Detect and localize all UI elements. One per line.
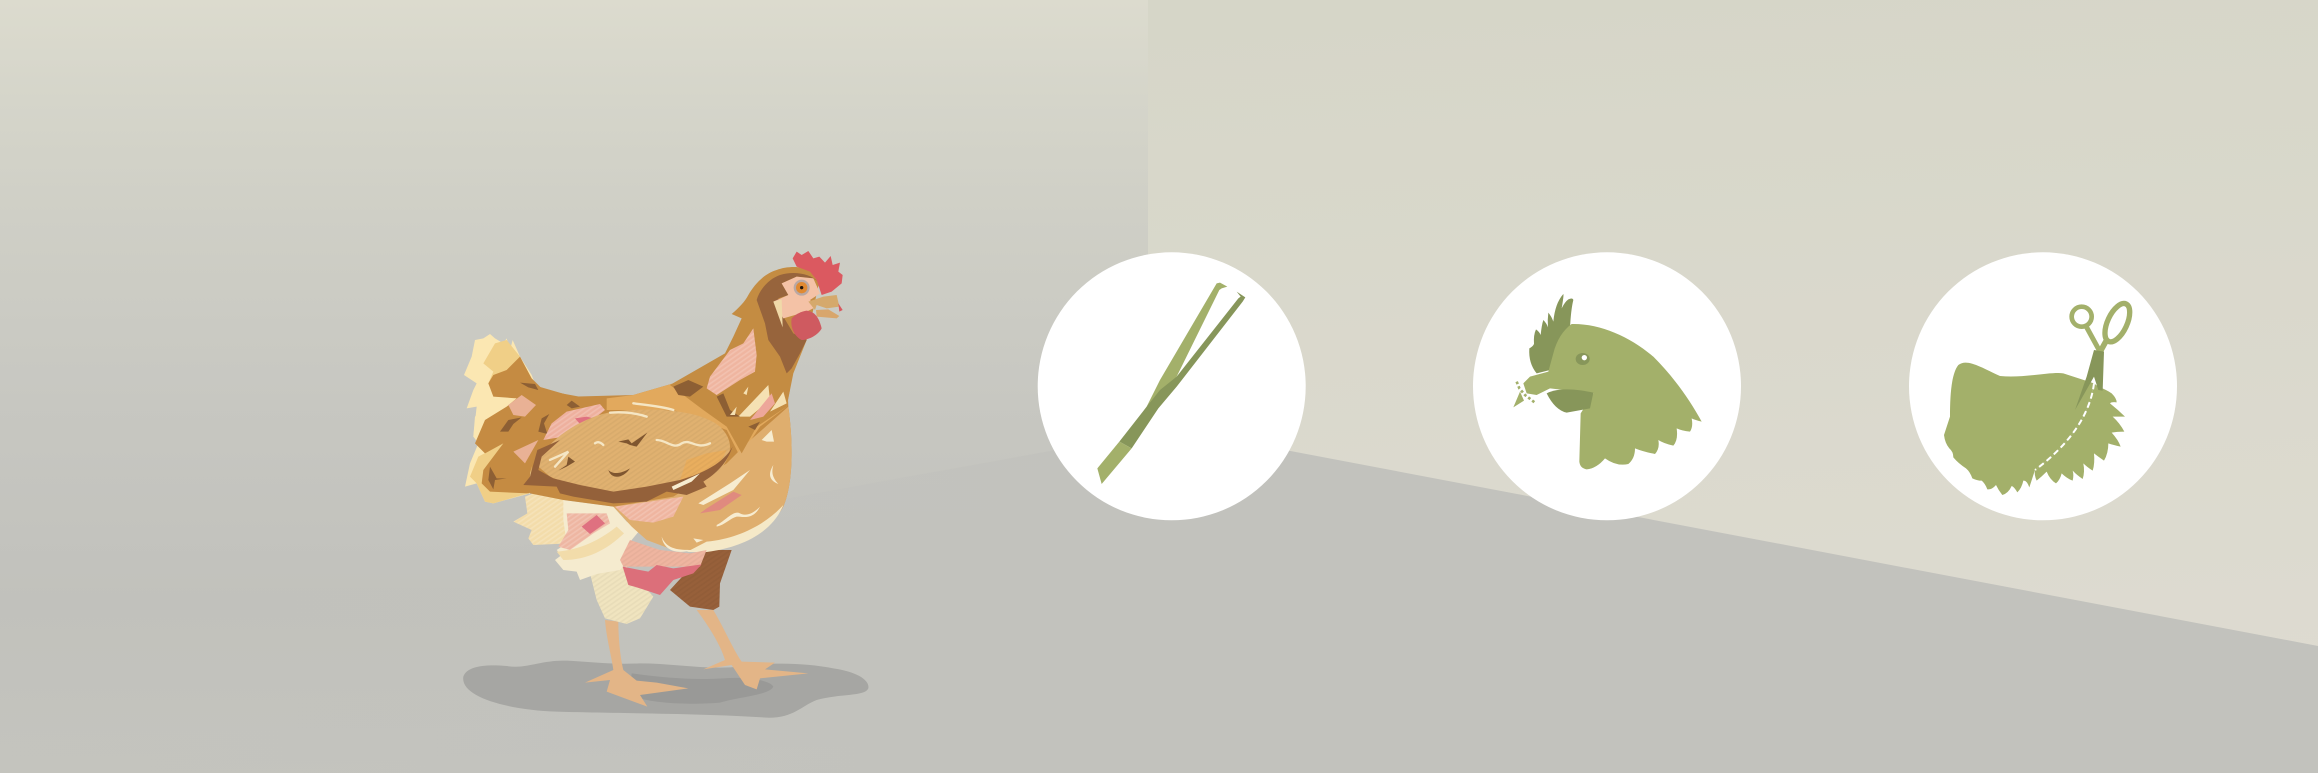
light tweezer arm [1147, 283, 1227, 407]
clipped wing [2035, 383, 2125, 483]
shoulder bare patch [750, 393, 775, 420]
head and neck [1523, 324, 1702, 469]
tail dark marks [488, 383, 580, 489]
tail brown plumage [475, 357, 615, 493]
belly bare patch [558, 513, 610, 550]
tail bare spots [508, 395, 538, 463]
body base [520, 353, 792, 550]
tweezer tip [1097, 442, 1132, 484]
under-wing bare patch [615, 497, 683, 523]
neck bare patch [707, 328, 757, 395]
back raw mark [575, 417, 593, 424]
breast [613, 407, 792, 550]
inner shadow [631, 673, 773, 704]
dashed cut line [2035, 383, 2094, 470]
tail cream stripe [473, 398, 516, 438]
shoulder cream patch [738, 385, 770, 417]
lower chest bare patch [620, 540, 707, 567]
white disc [1909, 252, 2177, 520]
comb [1529, 294, 1573, 373]
ear feather [773, 299, 783, 327]
near thigh [590, 567, 653, 624]
wing dark edge [523, 440, 733, 503]
comb [793, 251, 843, 295]
rear fluff [513, 488, 568, 545]
near leg [585, 620, 688, 707]
back bare patch [543, 404, 605, 440]
body [1944, 363, 2094, 495]
wing clipping icon [1944, 300, 2135, 495]
chicken shadow [463, 661, 868, 718]
hen head icon [1513, 294, 1702, 469]
wing dark marks [558, 433, 647, 477]
eye [794, 280, 810, 296]
eye [1576, 353, 1590, 365]
beak [808, 295, 843, 318]
neck dark hackle [757, 273, 818, 373]
icon circle: feather clipping [1909, 252, 2177, 520]
dark tweezer arm [1119, 292, 1245, 448]
belly feathers [555, 500, 640, 580]
back plumage [607, 347, 790, 457]
neck and shoulder plumage [670, 267, 820, 453]
wing [538, 410, 730, 497]
cut line [1517, 382, 1535, 403]
tail shaded feathers [470, 340, 532, 503]
breast cream marks [662, 430, 778, 552]
icon circle: beak trimming [1473, 252, 1741, 520]
background: floor left [0, 428, 1148, 773]
face [773, 277, 820, 318]
neck cream marks [730, 387, 787, 415]
breast raw mark [700, 492, 742, 513]
white disc [1038, 252, 1306, 520]
wing orange patch [680, 450, 727, 480]
lower chest raw patch [623, 564, 702, 595]
background: left wall [0, 0, 1148, 773]
wing hatch [538, 410, 730, 497]
trimmed beak tip [1513, 392, 1524, 407]
shoulder dark marks [673, 380, 760, 430]
breast underside [687, 505, 783, 552]
tail feathers [464, 334, 540, 503]
wattle [1547, 389, 1593, 413]
scissor handles [2072, 300, 2135, 355]
chicken [463, 251, 868, 718]
far thigh [670, 550, 732, 610]
background: right wall [1148, 0, 2318, 773]
scissor blades [2075, 350, 2104, 410]
white disc [1473, 252, 1741, 520]
background: floor right [1148, 424, 2318, 773]
far leg [697, 610, 808, 689]
belly band [557, 527, 624, 560]
scissors [2072, 300, 2135, 410]
wattle [791, 311, 822, 340]
icon circle: tweezers [1038, 252, 1306, 520]
wing cream marks [550, 403, 710, 467]
belly raw patch [582, 515, 605, 534]
tweezers [1097, 283, 1245, 484]
